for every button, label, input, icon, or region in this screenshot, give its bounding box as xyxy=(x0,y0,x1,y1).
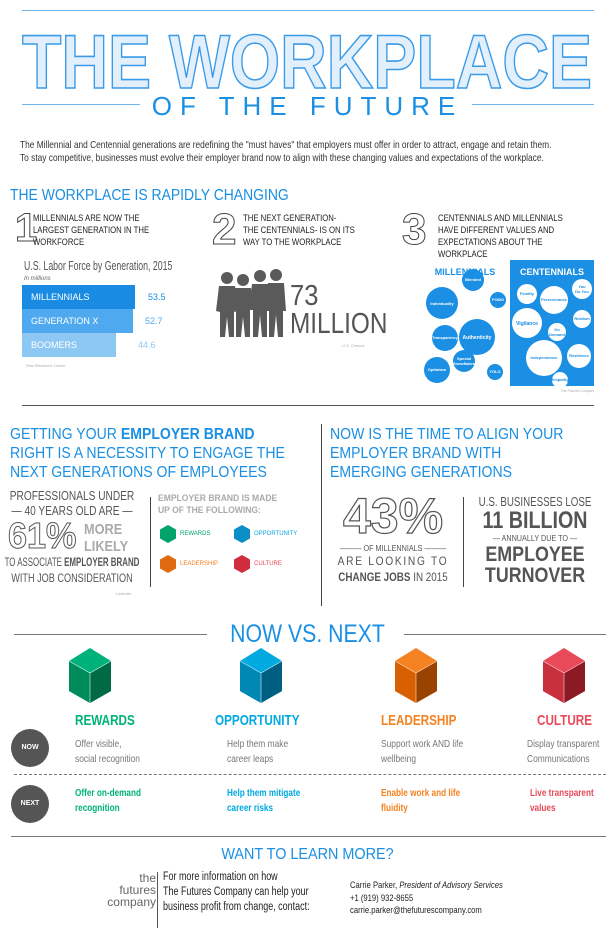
bubble chart: millennials vs centennials: Transparency xyxy=(432,335,459,340)
logo: the futures company: company xyxy=(107,895,156,909)
bar chart: labor force: 44.6 xyxy=(138,340,156,350)
point 2: THE NEXT GENERATION- xyxy=(243,213,336,223)
icon: people silhouettes xyxy=(216,269,286,337)
contact blurb: business profit from change, contact: xyxy=(163,901,310,913)
stat: 43%: 43% xyxy=(343,488,443,544)
heading: employer brand: GETTING YOUR EMPLOYER BRAND xyxy=(10,426,255,443)
bubble chart: millennials vs centennials: Resilience xyxy=(569,353,590,358)
point 1: WORKFORCE xyxy=(33,237,84,247)
employer brand components: UP OF THE FOLLOWING: xyxy=(158,505,261,516)
heading: align brand: EMPLOYER BRAND WITH xyxy=(330,445,501,462)
category labels: LEADERSHIP xyxy=(381,712,456,729)
stat: 11 billion: U.S. BUSINESSES LOSE xyxy=(479,494,591,509)
heading: employer brand: RIGHT IS A NECESSITY TO ENGAGE THE xyxy=(10,445,285,462)
bubble chart: millennials vs centennials: Blended xyxy=(465,277,481,282)
contact details: +1 (919) 932-8655 xyxy=(350,892,413,902)
bar chart: labor force xyxy=(22,259,172,368)
stat: 61% more likely xyxy=(4,488,139,596)
bar chart: labor force: 52.7 xyxy=(145,316,163,326)
bar chart: labor force: GENERATION X xyxy=(31,316,98,326)
bar chart: labor force: 53.5 xyxy=(148,292,166,302)
bubble chart: millennials vs centennials: Do You xyxy=(575,289,589,294)
bar chart: labor force: BOOMERS xyxy=(31,340,77,350)
stat: 43%: ARE LOOKING TO xyxy=(338,554,448,568)
next badge xyxy=(11,785,49,823)
contact details: Carrie Parker, President of Advisory Services xyxy=(350,880,503,890)
stat: 43%: ——— OF MILLENNIALS ——— xyxy=(340,543,446,553)
bubble chart: millennials vs centennials: Authenticity xyxy=(463,335,492,341)
point 3: HAVE DIFFERENT VALUES AND xyxy=(438,225,554,235)
logo: the futures company xyxy=(107,871,156,909)
bubble chart: millennials vs centennials: MILLENNIALS xyxy=(435,267,495,277)
bar chart: labor force: MILLENNIALS xyxy=(31,292,90,302)
bar chart: labor force: In millions xyxy=(24,276,51,282)
bubble chart: millennials vs centennials: Special xyxy=(457,356,471,361)
stat: 11 billion: 11 BILLION xyxy=(483,507,587,534)
now badge: NOW xyxy=(21,744,39,751)
text: U.S. Census xyxy=(342,343,364,348)
bubble chart: millennials vs centennials: On xyxy=(554,327,560,332)
next row text: fluidity xyxy=(381,802,408,814)
intro paragraph: To stay competitive, businesses must evolve their employer brand now to align with these changing values and expectations of the workplace. xyxy=(20,153,544,164)
bubble chart: millennials vs centennials: CENTENNIALS xyxy=(520,267,584,277)
stat: 73 million xyxy=(290,280,387,348)
bubble chart: millennials vs centennials: Fluidity xyxy=(520,291,535,296)
stat: 73 million: MILLION xyxy=(290,308,387,340)
now row text: Communications xyxy=(527,753,590,765)
point 1: LARGEST GENERATION IN THE xyxy=(33,225,149,235)
point 3: CENTENNIALS AND MILLENNIALS xyxy=(438,213,563,223)
bubble chart: millennials vs centennials: Snowflakes xyxy=(453,361,476,366)
bubble chart: millennials vs centennials: Demand xyxy=(549,332,565,337)
employer brand components: CULTURE xyxy=(254,561,282,567)
stat: 11 billion: TURNOVER xyxy=(485,564,585,587)
stat: 61% more likely: MORE xyxy=(84,521,122,538)
bubble chart: millennials vs centennials: Empathy xyxy=(552,377,569,382)
category labels: REWARDS xyxy=(75,712,135,729)
category labels xyxy=(75,712,592,729)
logo: the futures company: the xyxy=(139,871,156,885)
now badge xyxy=(11,729,49,767)
stat: 11 billion xyxy=(479,494,591,587)
stat: 43%: CHANGE JOBS IN 2015 xyxy=(338,570,448,584)
point 1 xyxy=(15,206,149,250)
divider xyxy=(22,405,594,406)
heading: align brand xyxy=(330,426,563,481)
now row text: Help them make xyxy=(227,738,288,750)
point 1: 1 xyxy=(15,206,37,250)
bubble chart: millennials vs centennials: YOLO xyxy=(489,369,501,374)
bubble chart: millennials vs centennials: Perseverance xyxy=(541,297,568,302)
heading: align brand: NOW IS THE TIME TO ALIGN YOUR xyxy=(330,426,563,443)
stat: 61% more likely: TO ASSOCIATE EMPLOYER BRAND xyxy=(5,555,139,569)
now row text: Offer visible, xyxy=(75,738,122,750)
employer brand components xyxy=(158,493,298,573)
heading: employer brand xyxy=(10,426,285,481)
heading: align brand: EMERGING GENERATIONS xyxy=(330,464,512,481)
point 3: 3 xyxy=(402,205,426,254)
intro paragraph xyxy=(20,140,551,164)
employer brand components: EMPLOYER BRAND IS MADE xyxy=(158,493,277,504)
point 3: WORKPLACE xyxy=(438,249,487,259)
stat: 61% more likely: PROFESSIONALS UNDER xyxy=(10,488,134,503)
next row text: career risks xyxy=(227,802,273,814)
category labels: CULTURE xyxy=(537,712,592,729)
cubes xyxy=(69,648,585,703)
next row text: Help them mitigate xyxy=(227,787,300,799)
next row text: Live transparent xyxy=(530,787,594,799)
bar chart: labor force: Pew Research Center xyxy=(26,363,65,368)
next row text: values xyxy=(530,802,556,814)
intro paragraph: The Millennial and Centennial generations are redefining the "must haves" that employers must offer in order to attract, engage and retain them. xyxy=(20,140,551,151)
now row text: Support work AND life xyxy=(381,738,463,750)
point 2: THE CENTENNIALS- IS ON ITS xyxy=(243,225,355,235)
stat: 43% xyxy=(338,488,448,584)
logo: the futures company: futures xyxy=(119,883,156,897)
heading: employer brand: NEXT GENERATIONS OF EMPLOYEES xyxy=(10,464,267,481)
bubble chart: millennials vs centennials xyxy=(424,260,594,393)
employer brand components: REWARDS xyxy=(180,531,210,537)
next row text: Enable work and life xyxy=(381,787,460,799)
bubble chart: millennials vs centennials: Individuality xyxy=(430,301,454,306)
bubble chart: millennials vs centennials: Independence xyxy=(531,355,558,360)
stat: 61% more likely: WITH JOB CONSIDERATION xyxy=(11,571,133,585)
bubble chart: millennials vs centennials: Vigilance xyxy=(516,321,538,327)
subtitle: of the future: OF THE FUTURE xyxy=(152,91,463,121)
now row text: social recognition xyxy=(75,753,140,765)
stat: 61% more likely: LIKELY xyxy=(84,538,128,555)
point 2: 2 xyxy=(212,205,236,254)
employer brand components: OPPORTUNITY xyxy=(254,531,297,537)
bubble chart: millennials vs centennials: Realism xyxy=(574,316,590,321)
employer brand components: LEADERSHIP xyxy=(180,561,218,567)
now row text: wellbeing xyxy=(381,753,416,765)
next badge: NEXT xyxy=(21,800,39,807)
point 3: EXPECTATIONS ABOUT THE xyxy=(438,237,542,247)
stat: 11 billion: — ANNUALLY DUE TO — xyxy=(493,533,577,543)
category labels: OPPORTUNITY xyxy=(215,712,300,729)
stat: 61% more likely: — 40 YEARS OLD ARE — xyxy=(12,503,132,518)
point 2: WAY TO THE WORKPLACE xyxy=(243,237,341,247)
heading: want to learn more: WANT TO LEARN MORE? xyxy=(221,846,394,863)
contact details xyxy=(350,880,503,915)
contact blurb: For more information on how xyxy=(163,871,278,883)
contact details: carrie.parker@thefuturescompany.com xyxy=(350,905,482,915)
next row text: Offer on-demand xyxy=(75,787,141,799)
bubble chart: millennials vs centennials: Optimism xyxy=(428,367,447,372)
stat: 61% more likely: 61% xyxy=(8,515,76,556)
now row text xyxy=(75,738,600,765)
bubble chart: millennials vs centennials: You xyxy=(578,284,586,289)
heading: now vs next: NOW VS. NEXT xyxy=(230,620,385,648)
stat: 73 million: 73 xyxy=(290,280,318,312)
section heading: rapidly changing: THE WORKPLACE IS RAPIDLY CHANGING xyxy=(10,187,289,204)
contact blurb: The Futures Company can help your xyxy=(163,886,309,898)
text: LinkedIn xyxy=(116,591,131,596)
now row text: Display transparent xyxy=(527,738,599,750)
point 2 xyxy=(212,205,355,254)
stat: 11 billion: EMPLOYEE xyxy=(485,543,585,566)
contact blurb xyxy=(163,871,310,913)
next row text xyxy=(75,787,594,814)
now row text: career leaps xyxy=(227,753,273,765)
bubble chart: millennials vs centennials: FOMO xyxy=(492,297,504,302)
next row text: recognition xyxy=(75,802,120,814)
point 1: MILLENNIALS ARE NOW THE xyxy=(33,213,140,223)
bar chart: labor force: U.S. Labor Force by Generation, 2015 xyxy=(24,259,172,273)
point 3 xyxy=(402,205,563,259)
top rule xyxy=(22,10,594,11)
